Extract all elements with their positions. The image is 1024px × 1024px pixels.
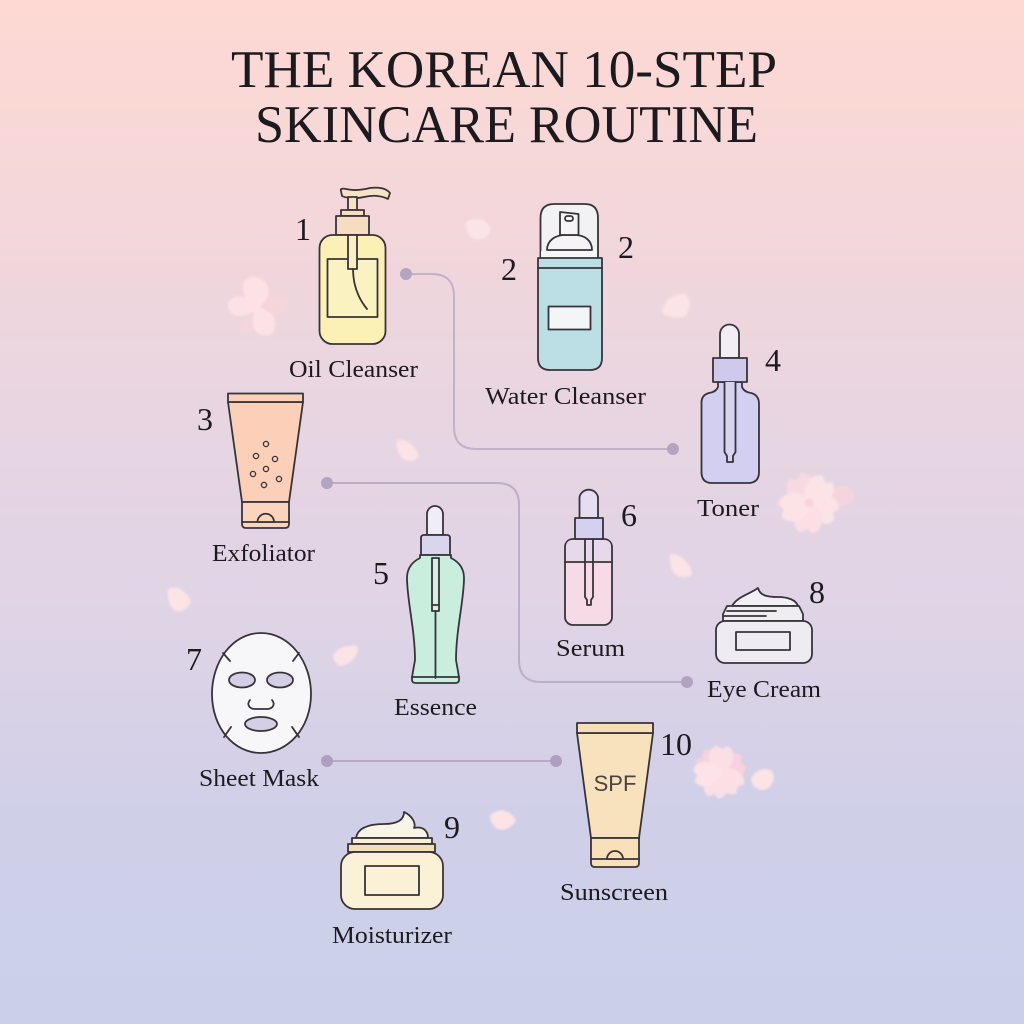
connector: sheet mask to sunscreen: [321, 755, 562, 767]
step 4: toner: [697, 324, 781, 522]
step 9: moisturizer: [332, 809, 460, 949]
label: exfoliator: Exfoliator: [212, 540, 315, 567]
icon: SPF tube: [577, 723, 653, 867]
icon: face mask: [212, 633, 311, 753]
label: essence: Essence: [394, 694, 477, 721]
label: sunscreen: Sunscreen: [560, 879, 668, 906]
step 7: sheet mask: [186, 633, 320, 792]
step 2: water cleanser: [485, 204, 646, 410]
blossom: right: [777, 470, 854, 534]
step number 2, right: 2: [618, 229, 634, 265]
label: oil cleanser: Oil Cleanser: [289, 356, 418, 383]
step number 8: 8: [809, 574, 825, 610]
icon: dropper bottle: [701, 324, 759, 483]
icon: cream jar: [716, 588, 812, 663]
step number 1: 1: [295, 211, 311, 247]
step number 7: 7: [186, 641, 202, 677]
step number 4: 4: [765, 342, 781, 378]
title: [231, 41, 777, 154]
step number 10: 10: [660, 726, 692, 762]
step 1: oil cleanser: [289, 188, 418, 383]
step 8: eye cream: [707, 574, 825, 703]
step number 9: 9: [444, 809, 460, 845]
step 3: exfoliator: [197, 394, 315, 567]
icon: tube with beads: [228, 394, 303, 528]
blossom: bottom right: [692, 745, 749, 801]
tube text: SPF: SPF: [594, 771, 636, 796]
step number 2, left: 2: [501, 251, 517, 287]
icon: cream jar: [341, 812, 443, 909]
label: water cleanser: Water Cleanser: [485, 383, 646, 410]
title: THE KOREAN 10-STEP: [231, 41, 777, 99]
title: SKINCARE ROUTINE: [255, 96, 758, 154]
decorative cherry blossoms and petals: [168, 219, 854, 830]
connector: exfoliator to eye cream: [321, 477, 693, 688]
label: sheet mask: Sheet Mask: [199, 765, 320, 792]
step 5: essence: [373, 506, 477, 721]
step number 3: 3: [197, 401, 213, 437]
label: eye cream: Eye Cream: [707, 676, 821, 703]
icon: pump bottle: [320, 188, 390, 344]
label: toner: Toner: [697, 495, 759, 522]
connector: oil cleanser to toner: [400, 268, 679, 455]
step number 5: 5: [373, 555, 389, 591]
step 10: sunscreen: [560, 723, 692, 906]
label: moisturizer: Moisturizer: [332, 922, 452, 949]
step number 6: 6: [621, 497, 637, 533]
label: serum: Serum: [556, 635, 625, 662]
blossom: left: [228, 277, 289, 335]
loose petals: [168, 219, 774, 830]
icon: curved dropper bottle: [407, 506, 464, 683]
icon: foam bottle: [538, 204, 602, 370]
step 6: serum: [556, 490, 637, 662]
icon: small dropper bottle: [565, 490, 612, 625]
